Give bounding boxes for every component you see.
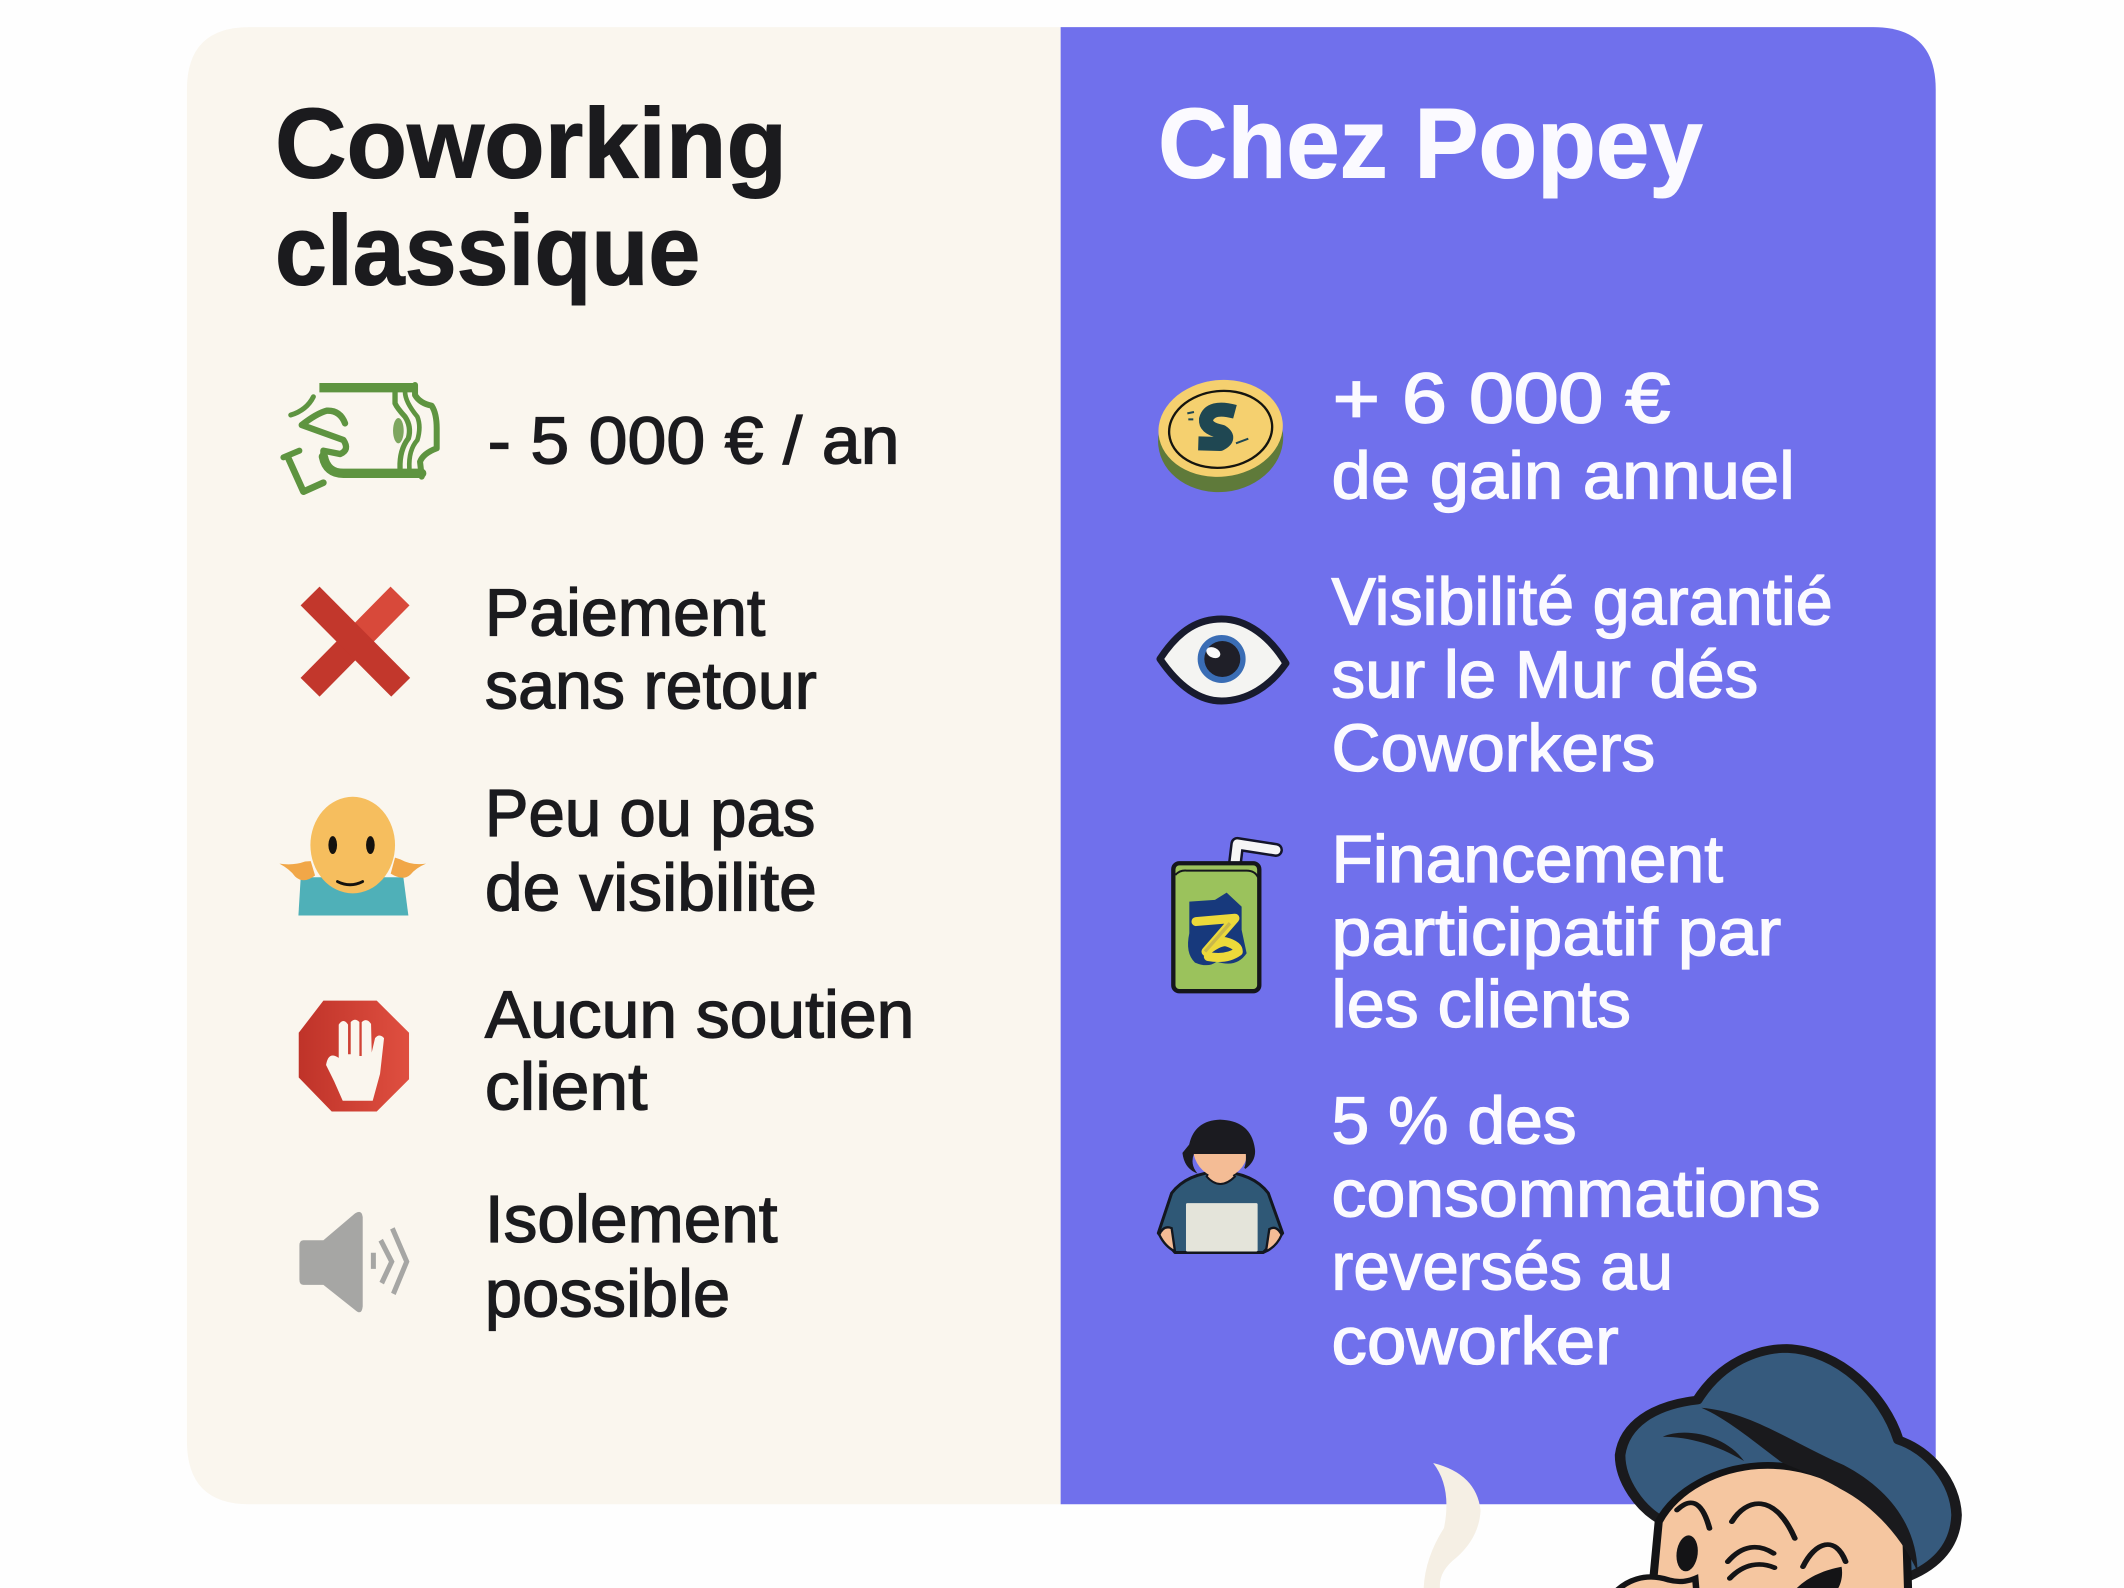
- text: 5 % des consommations: 5 % des: [1332, 1084, 1577, 1158]
- smoke from pipe: [1424, 1463, 1481, 1588]
- text: 5 % des consommations: coworker: [1332, 1305, 1619, 1379]
- text: visibilité garantie: sur le Mur dés: [1332, 639, 1758, 713]
- text: aucun soutien client: Aucun soutien: [485, 979, 914, 1053]
- icon: shrugging face: [279, 797, 426, 916]
- text: visibilité garantie: [1332, 565, 1833, 786]
- text: peu ou pas de visibilite: de visibilite: [485, 851, 817, 925]
- icon: person with laptop: [1158, 1121, 1283, 1252]
- icon: speaker: [299, 1212, 407, 1312]
- text: +6000 euros de gain annuel: de gain annuel: [1332, 439, 1795, 513]
- icon: banknote: [283, 385, 437, 492]
- text: 5 % des consommations: consommations: [1332, 1157, 1821, 1231]
- row: visibilité: [1160, 565, 1833, 786]
- text: 5 % des consommations: [1332, 1084, 1821, 1379]
- mascot cap: [1620, 1348, 1957, 1577]
- text: peu ou pas de visibilite: [485, 777, 817, 925]
- row: isolement possible: [299, 1183, 778, 1332]
- row: financement participatif: [1173, 823, 1781, 1042]
- mascot left eye: [1675, 1535, 1700, 1572]
- mascot mouth: [1791, 1567, 1842, 1588]
- text: peu ou pas de visibilite: Peu ou pas: [485, 777, 815, 851]
- row: aucun soutien client: [299, 979, 914, 1124]
- icon: eye: [1160, 619, 1286, 701]
- icon: coin: [1153, 374, 1288, 498]
- text: visibilité garantie: Coworkers: [1332, 712, 1655, 786]
- text: +6000 euros de gain annuel: + 6 000 €: [1333, 359, 1670, 438]
- text: isolement possible: possible: [485, 1258, 730, 1332]
- panel: coworking classique: [187, 27, 1061, 1504]
- panel: chez popey: [1061, 27, 1936, 1504]
- icon: stop hand: [299, 1001, 409, 1111]
- text: aucun soutien client: [485, 979, 914, 1124]
- text: +6000 euros de gain annuel: [1332, 359, 1795, 513]
- mascot: sailor character: [1608, 1348, 1957, 1588]
- row: consommations reversées: [1158, 1084, 1821, 1379]
- text: isolement possible: [485, 1183, 778, 1332]
- cap brim crease: [1663, 1433, 1744, 1461]
- text: isolement possible: Isolement: [485, 1183, 778, 1257]
- text: financement participatif: [1332, 823, 1781, 1042]
- right panel background: [1061, 27, 1936, 1504]
- row: cost: [283, 385, 899, 492]
- heading: Coworking classique: Coworking: [275, 87, 787, 198]
- mascot face: [1651, 1465, 1909, 1588]
- mascot nose: [1608, 1577, 1697, 1588]
- row: gain annuel: [1153, 359, 1795, 513]
- heading: Coworking classique: [275, 87, 787, 305]
- heading: Coworking classique: classique: [275, 194, 700, 305]
- text: paiement sans retour: Paiement: [485, 576, 765, 650]
- row: paiement sans retour: [310, 576, 817, 723]
- text: paiement sans retour: sans retour: [485, 649, 817, 723]
- text: financement participatif: Financement: [1332, 823, 1723, 897]
- text: paiement sans retour: [485, 576, 817, 723]
- text: 5 % des consommations: reversés au: [1332, 1231, 1673, 1305]
- text: visibilité garantie: Visibilité garantié: [1332, 565, 1833, 639]
- heading: Chez Popey: Chez Popey: [1158, 87, 1703, 198]
- icon: red cross: [310, 596, 401, 687]
- cap band: [1701, 1408, 1918, 1572]
- left panel background: [187, 27, 1061, 1504]
- row: peu de visibilite: [279, 777, 817, 925]
- text: financement participatif: les clients: [1332, 968, 1631, 1042]
- text: financement participatif: participatif par: [1332, 896, 1781, 970]
- mascot brows and wink: [1677, 1503, 1846, 1578]
- text: annual cost: - 5 000 € / an: [488, 404, 899, 478]
- text: aucun soutien client: client: [485, 1050, 647, 1124]
- icon: juice box: [1173, 844, 1276, 991]
